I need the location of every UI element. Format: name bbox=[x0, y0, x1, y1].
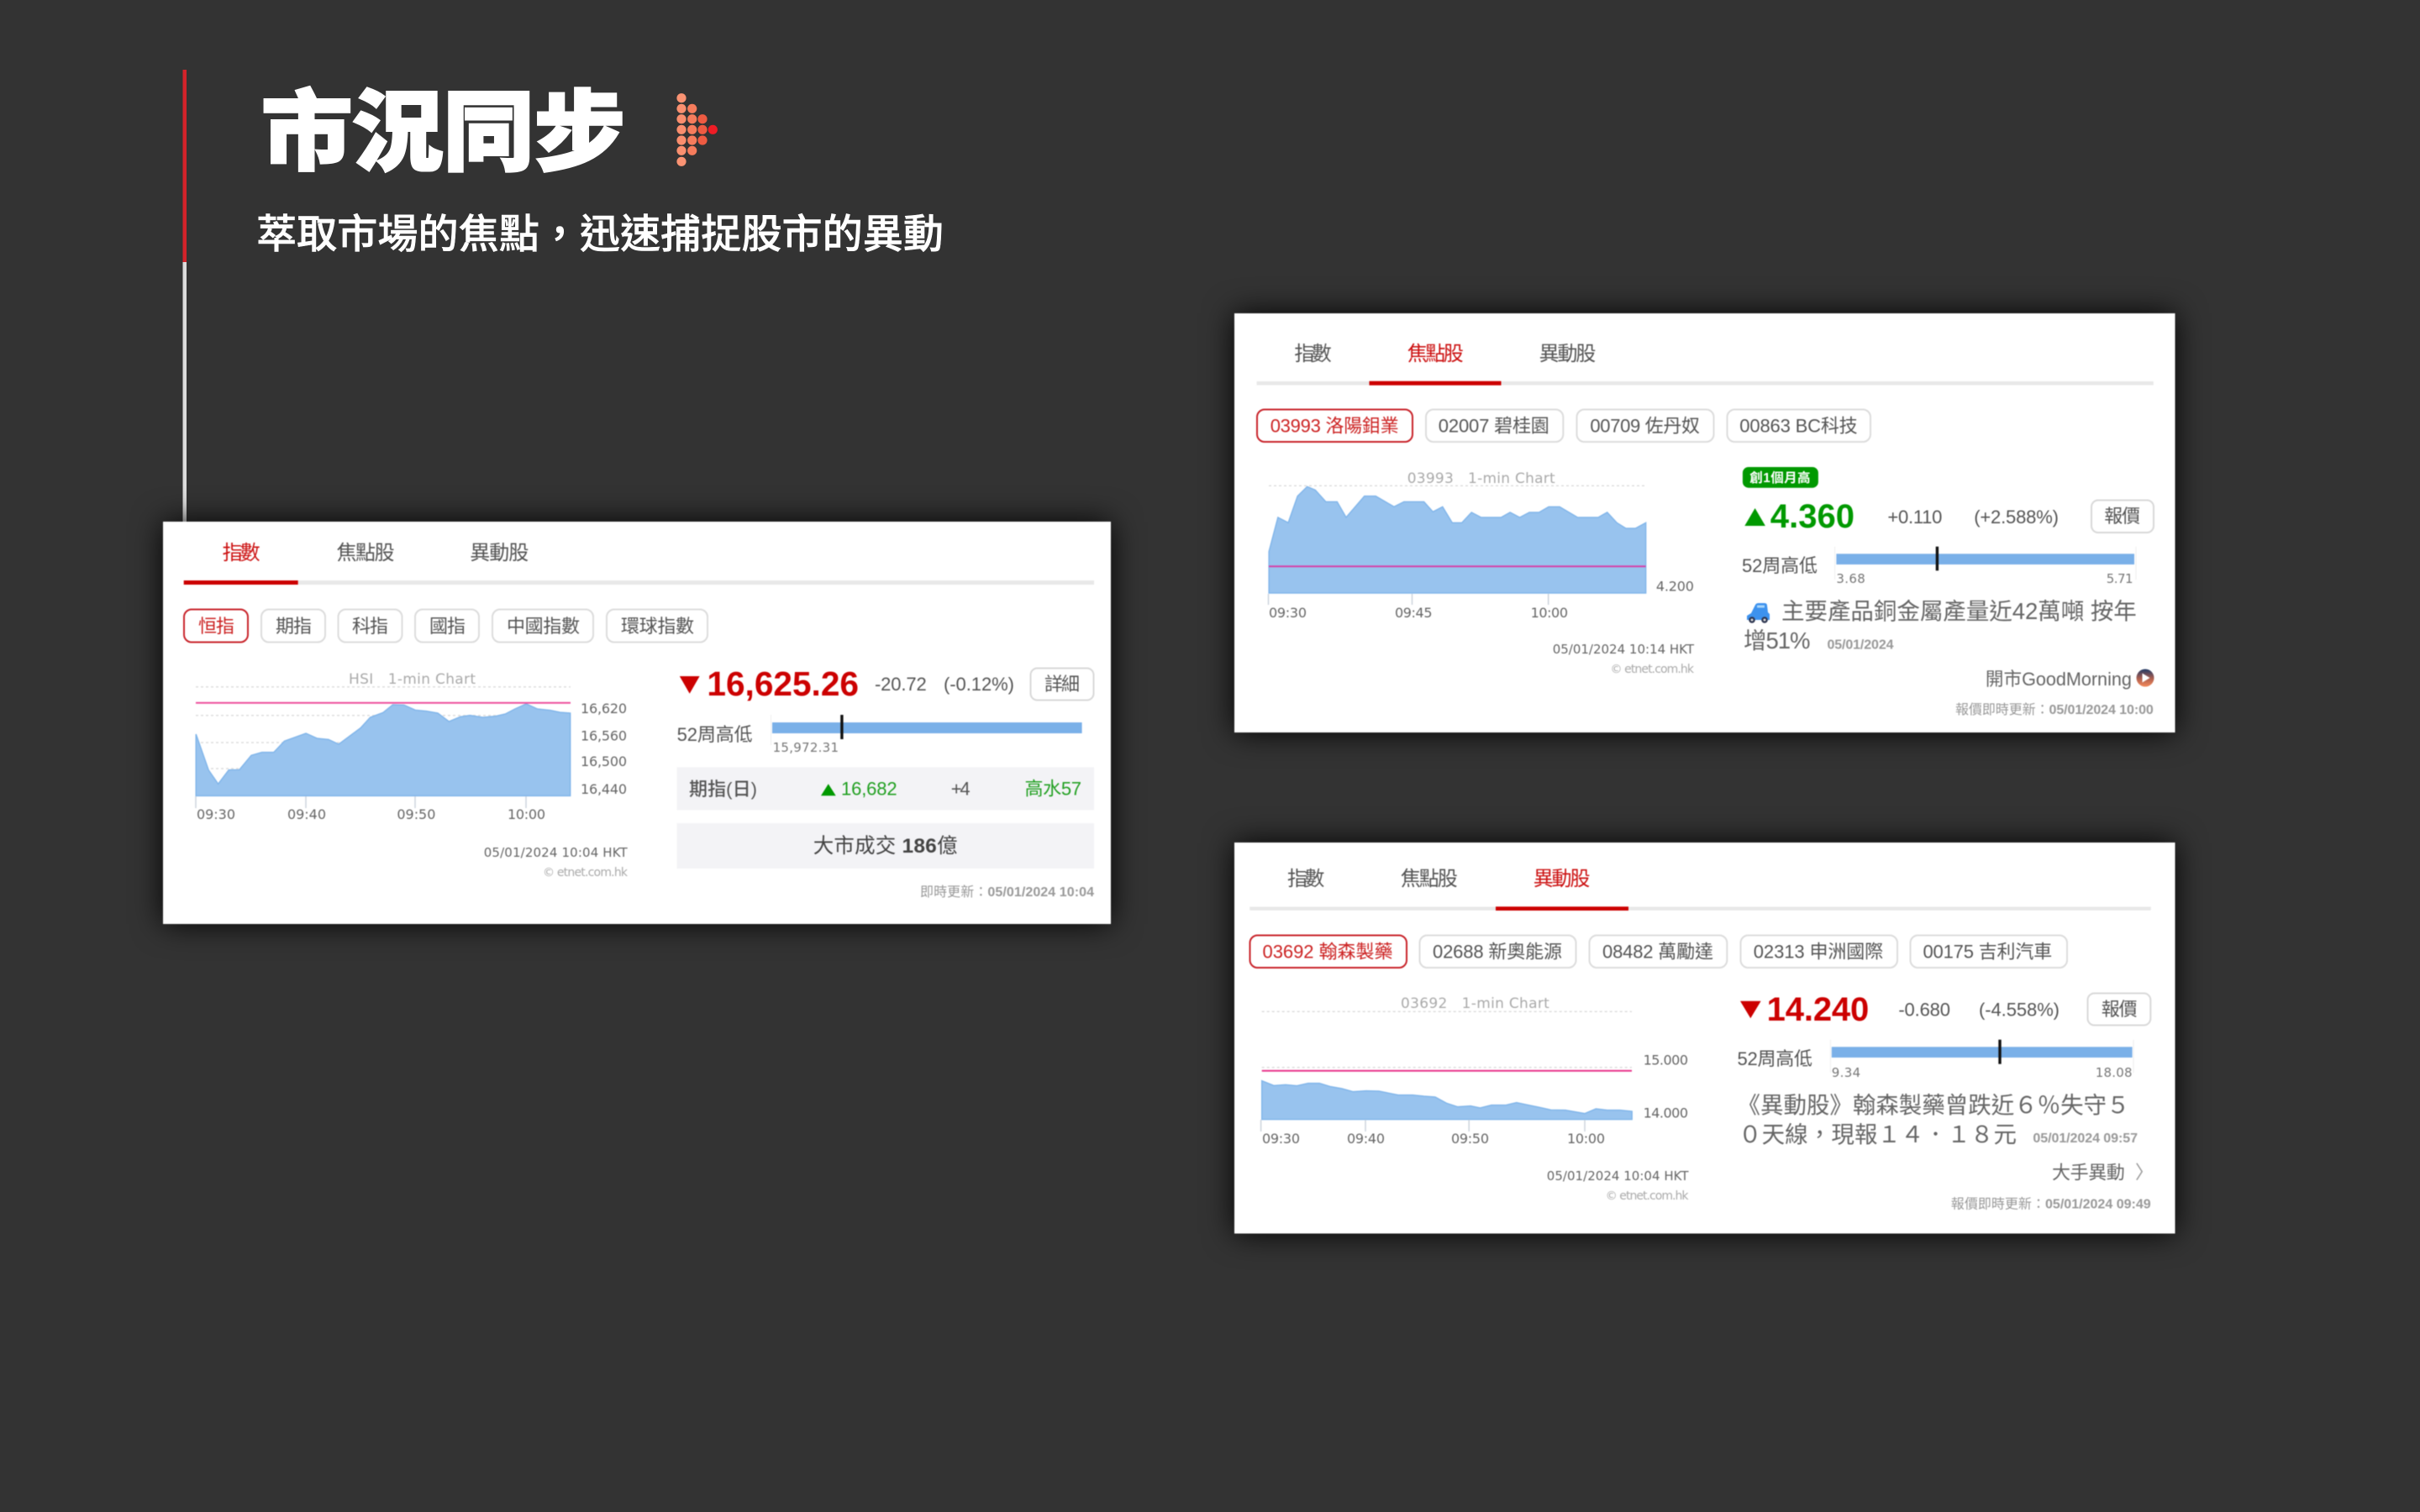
line chart: 03993: 09:45 bbox=[1395, 605, 1432, 621]
tabs: focus panel: 焦點股 bbox=[1407, 343, 1464, 365]
line chart: 03692 bbox=[1261, 995, 1689, 1203]
chips: movers: 03692 翰森製藥 bbox=[1262, 941, 1393, 963]
line chart: HSI: HSI 1-min Chart bbox=[349, 671, 476, 688]
52-week range bar: 5.71 bbox=[2107, 571, 2133, 586]
quote: HSI price bbox=[680, 664, 1094, 703]
futures row: 期指(日) bbox=[689, 779, 757, 800]
futures row: 16,682 bbox=[841, 778, 897, 800]
futures row bbox=[677, 767, 1094, 810]
line chart: 03692: 14.000 bbox=[1644, 1105, 1688, 1121]
news item: 05/01/2024 bbox=[1827, 638, 1894, 652]
tabs: movers panel: 焦點股 bbox=[1401, 868, 1458, 890]
tabs: index panel: 異動股 bbox=[470, 542, 529, 564]
subtitle: 萃取市場的焦點，迅速捕捉股市的異動 bbox=[256, 213, 944, 257]
line chart: HSI: 16,620 bbox=[581, 701, 627, 717]
line chart: HSI: 16,440 bbox=[581, 781, 627, 797]
news item: 《異動股》翰森製藥曾跌近６％失守５ bbox=[1738, 1092, 2129, 1118]
52-week range bar: 52周高低 bbox=[1738, 1048, 1812, 1069]
badge: one-month high bbox=[1743, 467, 1818, 488]
line chart: 03692: 15.000 bbox=[1644, 1052, 1688, 1068]
line chart: 03993: 05/01/2024 10:14 HKT bbox=[1553, 642, 1695, 657]
quote: HSI price: -20.72 bbox=[875, 674, 927, 695]
line chart: 03692: © etnet.com.hk bbox=[1606, 1189, 1689, 1203]
quote: 03692 price: 14.240 bbox=[1767, 991, 1869, 1028]
line chart: 03993 bbox=[1269, 470, 1695, 676]
line chart: HSI: © etnet.com.hk bbox=[543, 866, 629, 879]
tabs: movers panel: 異動股 bbox=[1534, 868, 1590, 890]
icon: dotted arrow bbox=[676, 93, 718, 166]
quote: 03993 price: 報價 bbox=[2104, 506, 2140, 527]
tabs: index panel bbox=[184, 542, 1094, 585]
line chart: 03692: 03692 1-min Chart bbox=[1401, 995, 1549, 1012]
chips: movers: 00175 吉利汽車 bbox=[1923, 941, 2052, 963]
chips: focus stocks: 02007 碧桂園 bbox=[1439, 415, 1549, 437]
panel: focus stocks bbox=[1234, 313, 2175, 732]
line chart: HSI: 09:30 bbox=[197, 806, 235, 822]
chips: focus stocks: 03993 洛陽鉬業 bbox=[1270, 415, 1399, 437]
line chart: 03692: 09:40 bbox=[1347, 1131, 1385, 1147]
chips: index selector: 環球指數 bbox=[621, 616, 694, 637]
news item bbox=[1744, 598, 2137, 654]
quote: 03692 price: (-4.558%) bbox=[1979, 1000, 2060, 1020]
tabs: focus panel: 指數 bbox=[1294, 343, 1332, 365]
link: morning show: 開市GoodMorning bbox=[1986, 669, 2132, 690]
quote: 03692 price: 報價 bbox=[2102, 999, 2138, 1020]
chips: focus stocks: 00709 佐丹奴 bbox=[1590, 415, 1700, 437]
link: big-player moves: 〉 bbox=[2135, 1162, 2154, 1183]
52-week range bar bbox=[1742, 547, 2136, 586]
chips: focus stocks: 00863 BC科技 bbox=[1739, 415, 1858, 437]
line chart: HSI: 09:50 bbox=[397, 806, 435, 822]
quote: 03993 price: +0.110 bbox=[1887, 507, 1942, 528]
news item: 增51% bbox=[1744, 627, 1810, 654]
line chart: HSI: 16,500 bbox=[581, 753, 627, 769]
tabs: index panel: 焦點股 bbox=[336, 542, 395, 564]
quote: HSI price: (-0.12%) bbox=[944, 674, 1014, 695]
news item bbox=[1738, 1092, 2138, 1147]
decorative vertical line red and grey bbox=[183, 70, 187, 522]
market turnover row bbox=[677, 823, 1094, 869]
line chart: HSI: 05/01/2024 10:04 HKT bbox=[484, 845, 629, 860]
tabs: movers panel bbox=[1249, 868, 2151, 911]
chips: index selector: 期指 bbox=[276, 616, 312, 637]
52-week range bar: 15,972.31 bbox=[773, 740, 839, 755]
line chart: HSI: 09:40 bbox=[287, 806, 326, 822]
badge: one-month high: 創1個月高 bbox=[1749, 470, 1810, 486]
chips: movers: 02688 新奧能源 bbox=[1433, 941, 1562, 963]
quote: 03993 price bbox=[1744, 498, 2154, 535]
tabs: movers panel: 指數 bbox=[1287, 868, 1324, 890]
52-week range bar: 3.68 bbox=[1836, 571, 1865, 586]
news item: ０天線，現報１４．１８元 bbox=[1739, 1121, 2017, 1147]
tabs: focus panel bbox=[1257, 343, 2154, 386]
tabs: focus panel: 異動股 bbox=[1539, 343, 1596, 365]
52-week range bar: 18.08 bbox=[2096, 1065, 2133, 1080]
line chart: 03993: 03993 1-min Chart bbox=[1407, 470, 1555, 487]
52-week range bar: 9.34 bbox=[1832, 1065, 1860, 1080]
icon: blue car bbox=[1747, 603, 1770, 623]
chips: index selector bbox=[184, 610, 708, 642]
panel: movers bbox=[1234, 843, 2175, 1233]
line chart: 03993: © etnet.com.hk bbox=[1610, 663, 1695, 676]
line chart: HSI bbox=[196, 671, 629, 879]
chips: index selector: 國指 bbox=[429, 616, 466, 637]
quote: 03993 price: (+2.588%) bbox=[1974, 507, 2059, 528]
line chart: 03993: 10:00 bbox=[1531, 605, 1568, 621]
52-week range bar: 52周高低 bbox=[1742, 555, 1818, 576]
chips: index selector: 中國指數 bbox=[507, 616, 580, 637]
line chart: HSI: 10:00 bbox=[508, 806, 545, 822]
line chart: 03993: 09:30 bbox=[1269, 605, 1307, 621]
chips: index selector: 恒指 bbox=[198, 616, 234, 637]
news item: 05/01/2024 09:57 bbox=[2033, 1131, 2138, 1146]
52-week range bar bbox=[677, 715, 1082, 755]
52-week range bar: 52周高低 bbox=[677, 724, 753, 745]
chips: movers: 08482 萬勵達 bbox=[1602, 941, 1713, 963]
news item: 主要產品銅金屬產量近42萬噸 按年 bbox=[1781, 598, 2137, 624]
update time: 即時更新：05/01/2024 10:04 bbox=[920, 885, 1094, 900]
quote: 03692 price bbox=[1740, 991, 2150, 1028]
update time: 報價即時更新：05/01/2024 10:00 bbox=[1955, 702, 2154, 717]
chips: focus stocks bbox=[1257, 410, 1870, 442]
title: 市況同步 bbox=[261, 85, 625, 182]
line chart: HSI: 16,560 bbox=[581, 727, 627, 744]
link: big-player moves: 大手異動 bbox=[2052, 1163, 2125, 1183]
52-week range bar bbox=[1738, 1040, 2133, 1080]
quote: HSI price: 16,625.26 bbox=[707, 664, 859, 703]
line chart: 03692: 09:30 bbox=[1262, 1131, 1300, 1147]
line chart: 03993: 4.200 bbox=[1656, 578, 1694, 595]
quote: 03692 price: -0.680 bbox=[1898, 1000, 1950, 1020]
quote: 03993 price: 4.360 bbox=[1770, 498, 1854, 535]
quote: HSI price: 詳細 bbox=[1044, 674, 1080, 695]
line chart: 03692: 09:50 bbox=[1451, 1131, 1489, 1147]
update time: 報價即時更新：05/01/2024 09:49 bbox=[1951, 1196, 2151, 1211]
chips: movers: 02313 申洲國際 bbox=[1754, 941, 1883, 963]
chips: index selector: 科指 bbox=[352, 616, 388, 637]
futures row: 高水57 bbox=[1025, 778, 1081, 800]
market turnover row: 大市成交 186億 bbox=[813, 834, 958, 858]
line chart: 03692: 10:00 bbox=[1567, 1131, 1605, 1147]
tabs: index panel: 指數 bbox=[223, 542, 260, 564]
futures row: +4 bbox=[951, 778, 971, 800]
line chart: 03692: 05/01/2024 10:04 HKT bbox=[1547, 1168, 1689, 1184]
panel: index bbox=[163, 522, 1111, 924]
chips: movers bbox=[1250, 936, 2067, 968]
